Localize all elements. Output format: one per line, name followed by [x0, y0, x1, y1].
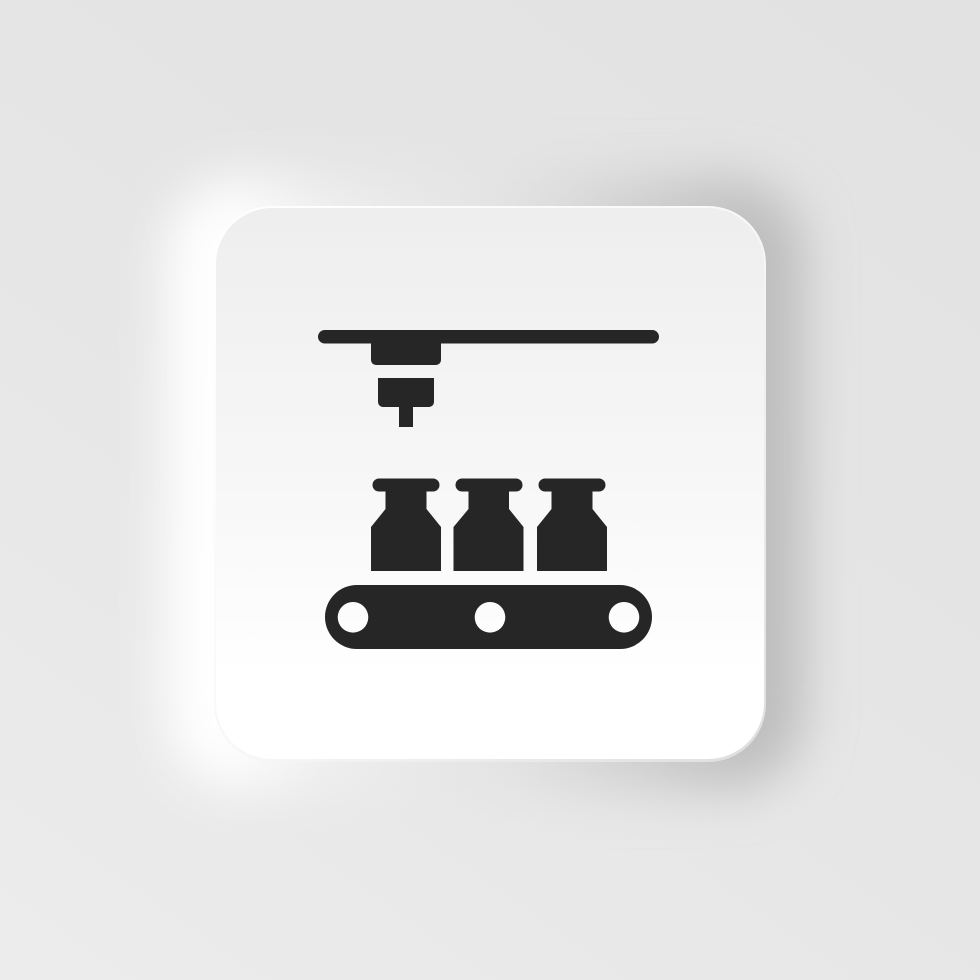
icon: bottle two	[454, 478, 524, 571]
panel: rounded square card	[214, 206, 766, 762]
icon: overhead rail	[318, 330, 659, 344]
icon: conveyor belt	[325, 585, 652, 649]
icon: filling nozzle	[378, 378, 434, 427]
icon: bottle three	[537, 478, 607, 571]
icon: bottle one	[371, 478, 441, 571]
icon: nozzle mount	[371, 340, 441, 365]
icon: factory conveyor with bottles	[318, 330, 659, 649]
card light and shadow halo	[166, 178, 802, 790]
